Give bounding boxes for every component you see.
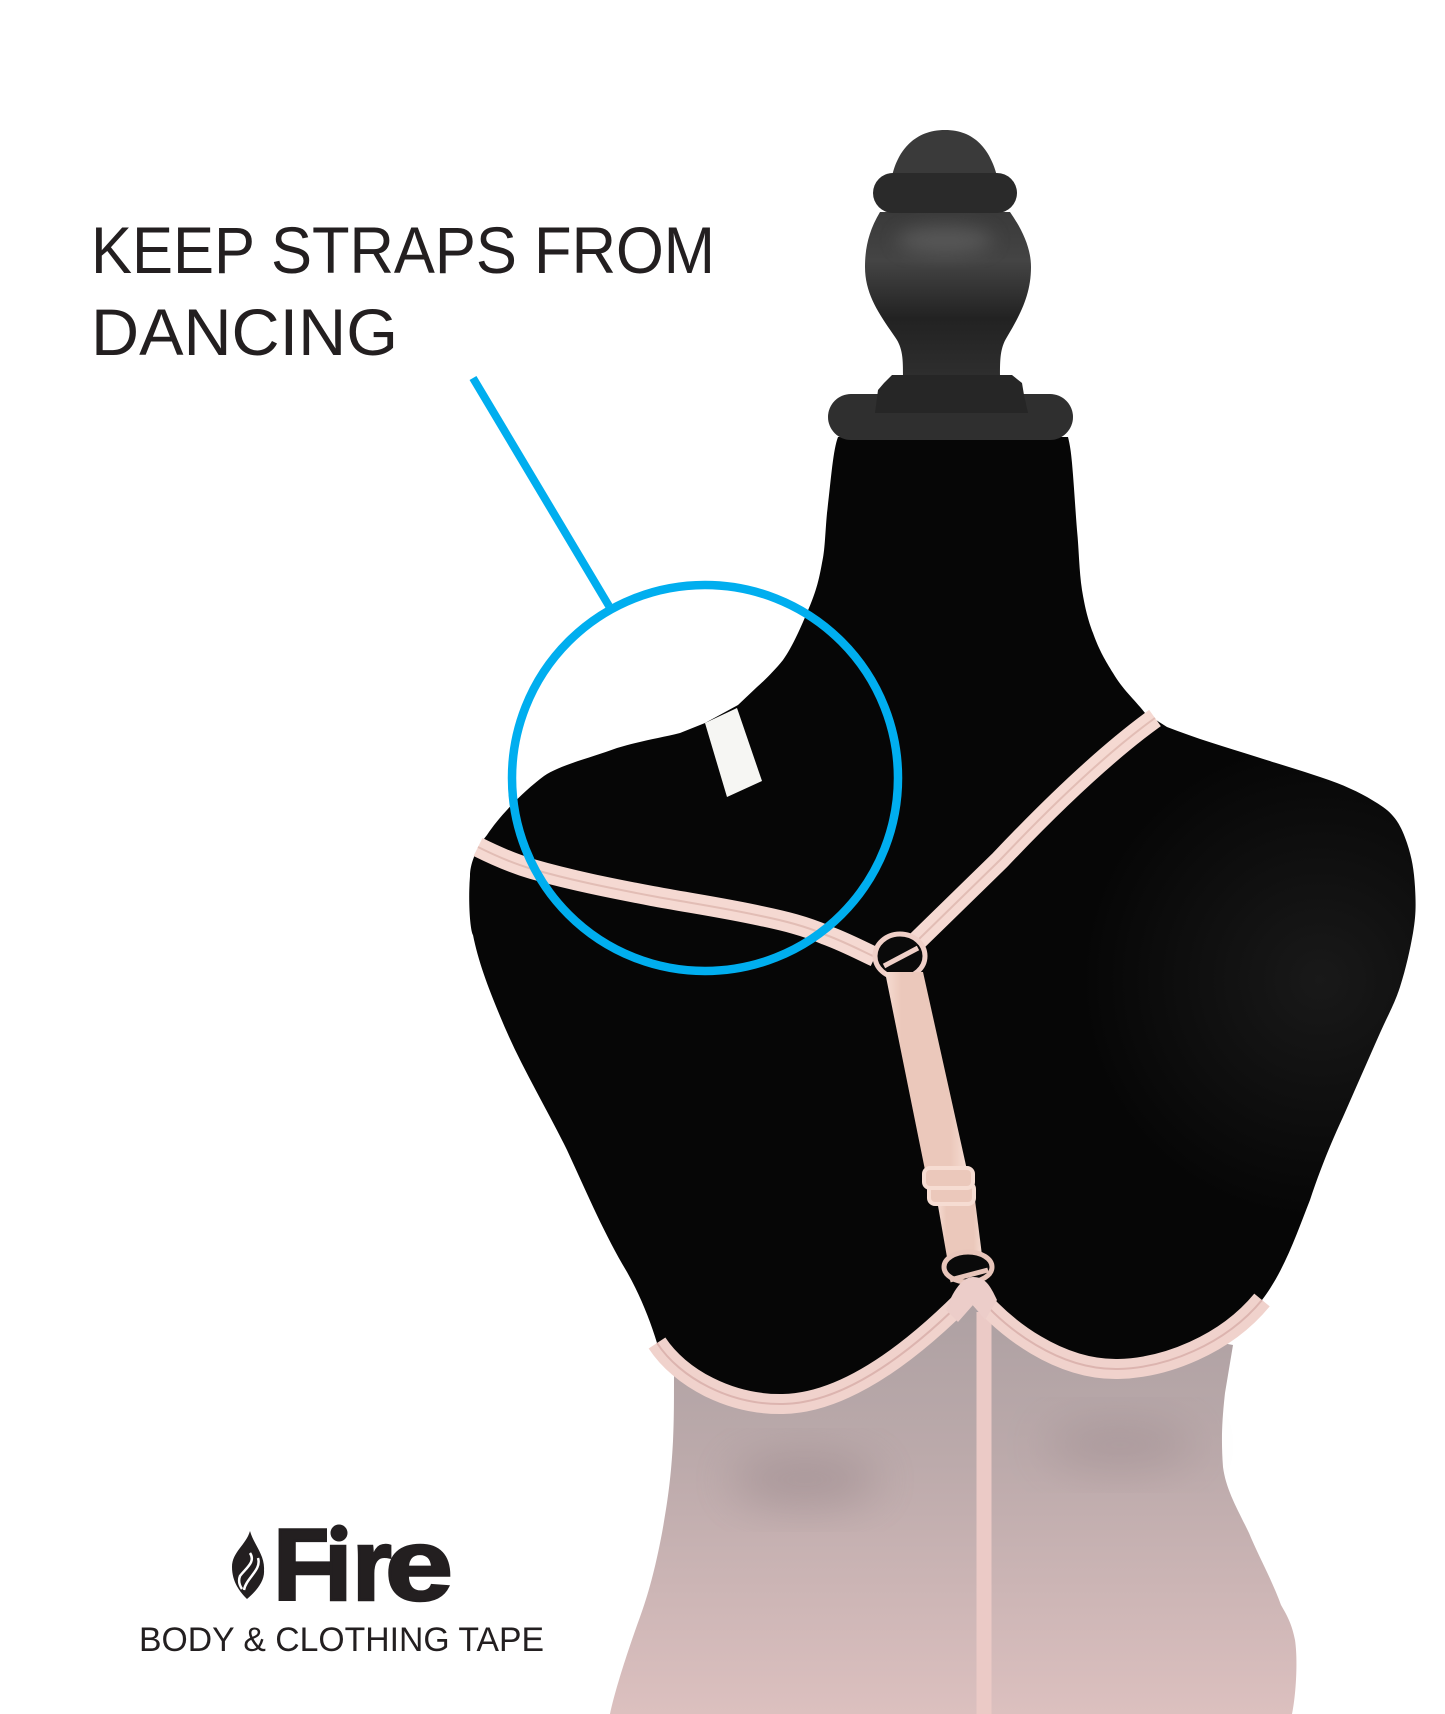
finial cap <box>892 130 997 176</box>
finial <box>828 130 1073 440</box>
centre back strap lower <box>937 1200 983 1263</box>
gathered centre <box>946 1277 997 1322</box>
slider buckle <box>924 1168 974 1204</box>
dress shadow right <box>1045 1421 1195 1469</box>
wordmark: e <box>385 1508 453 1622</box>
left shoulder strap <box>478 847 875 957</box>
icon: flame <box>232 1531 264 1599</box>
heading: KEEP STRAPS FROM <box>91 213 715 287</box>
wordmark: Fir <box>273 1508 392 1622</box>
finial collar <box>875 375 1028 413</box>
mannequin with strap <box>469 437 1416 1714</box>
wordmark round i-dot <box>330 1524 348 1542</box>
finial ball highlight <box>897 226 993 254</box>
upper ring <box>875 934 925 978</box>
tagline: BODY & CLOTHING TAPE <box>139 1621 544 1659</box>
centre back strap upper <box>885 972 967 1170</box>
velvet bust <box>469 437 1416 1404</box>
right shoulder strap <box>917 718 1155 941</box>
heading: DANCING <box>91 295 398 369</box>
dress body <box>610 1296 1296 1714</box>
white tape piece <box>705 708 762 797</box>
lower ring <box>944 1252 992 1282</box>
callout leader line <box>473 378 609 606</box>
lower neckline strap <box>657 1290 1262 1404</box>
heading <box>91 213 715 369</box>
finial disc <box>828 394 1073 440</box>
dress seam <box>976 1312 992 1714</box>
brand logo <box>139 1508 544 1659</box>
finial ring <box>873 173 1017 213</box>
callout circle <box>512 585 898 971</box>
wordmark i-dot mask <box>327 1520 351 1543</box>
dress shadow left <box>730 1454 880 1506</box>
finial ball <box>865 212 1031 376</box>
